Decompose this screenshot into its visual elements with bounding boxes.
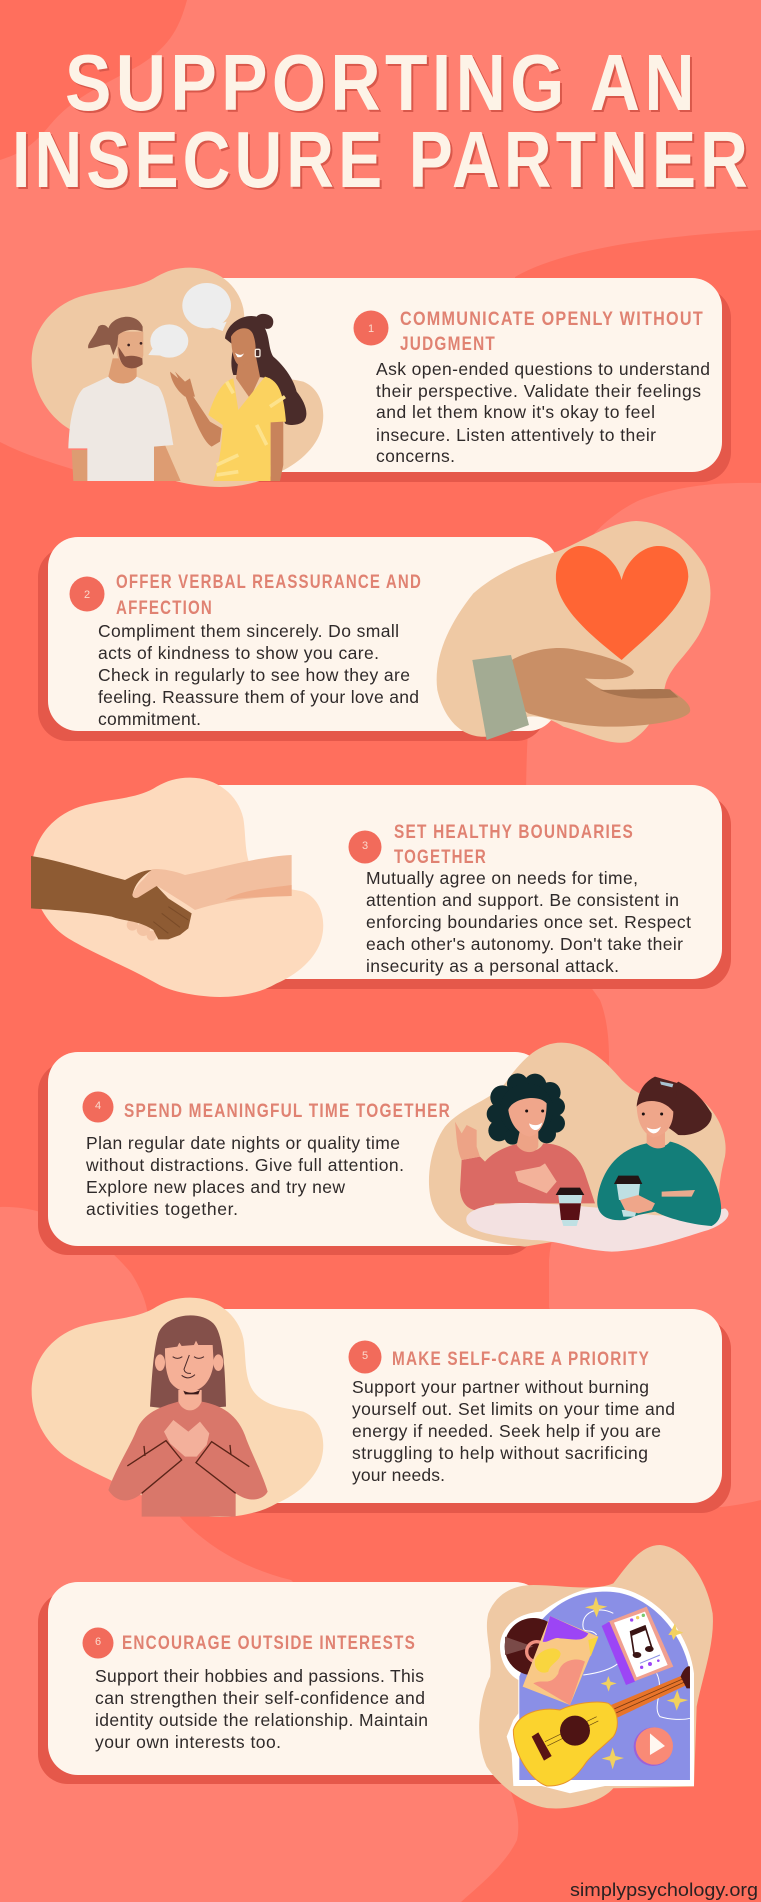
body text 3: enforcing boundaries once set. Respect bbox=[366, 912, 691, 932]
body text 5: your needs. bbox=[352, 1465, 445, 1485]
body text 5: yourself out. Set limits on your time and bbox=[352, 1399, 675, 1419]
heading 2 bbox=[116, 572, 422, 619]
body text 4: activities together. bbox=[86, 1199, 238, 1219]
body text 1: insecure. Listen attentively to their bbox=[376, 425, 656, 445]
source credit: simplypsychology.org bbox=[570, 1880, 758, 1900]
number badge 2 bbox=[70, 576, 104, 612]
title bbox=[12, 38, 752, 204]
number badge 4 bbox=[82, 1092, 114, 1122]
body text 6: Support their hobbies and passions. This bbox=[95, 1666, 424, 1686]
body text 1: their perspective. Validate their feelings bbox=[376, 381, 701, 401]
illustration: hand holding heart bbox=[437, 521, 710, 743]
body text 6: identity outside the relationship. Maintain bbox=[95, 1710, 428, 1730]
body text 3: Mutually agree on needs for time, bbox=[366, 868, 638, 888]
heading 2: AFFECTION bbox=[116, 598, 213, 619]
heading 4: SPEND MEANINGFUL TIME TOGETHER bbox=[124, 1101, 451, 1122]
body text 1: and let them know it's okay to feel bbox=[376, 402, 655, 422]
body text 4: Plan regular date nights or quality time bbox=[86, 1133, 400, 1153]
illustration: two women with coffee bbox=[429, 1043, 729, 1252]
number badge 3: 3 bbox=[362, 840, 368, 852]
number badge 6: 6 bbox=[95, 1636, 101, 1648]
body text 5: energy if needed. Seek help if you are bbox=[352, 1421, 661, 1441]
heading 1 bbox=[400, 309, 704, 355]
body text 2: commitment. bbox=[98, 709, 201, 729]
illustration: two people talking bbox=[32, 268, 323, 487]
panel: step 2 reassurance bbox=[38, 521, 710, 743]
body text 4: Explore new places and try new bbox=[86, 1177, 345, 1197]
body text 3: insecurity as a personal attack. bbox=[366, 956, 619, 976]
body text 6 bbox=[95, 1666, 428, 1752]
body text 2 bbox=[98, 621, 419, 729]
body text 5: Support your partner without burning bbox=[352, 1377, 649, 1397]
body text 3: each other's autonomy. Don't take their bbox=[366, 934, 683, 954]
heading 3 bbox=[394, 822, 634, 868]
panel: step 3 boundaries bbox=[31, 778, 731, 997]
number badge 3 bbox=[348, 830, 382, 864]
body text 3 bbox=[366, 868, 691, 976]
body text 4 bbox=[85, 1133, 404, 1219]
body text 1: concerns. bbox=[376, 446, 455, 466]
body text 2: Check in regularly to see how they are bbox=[98, 665, 410, 685]
number badge 6 bbox=[82, 1628, 114, 1658]
heading 1: COMMUNICATE OPENLY WITHOUT bbox=[400, 309, 704, 330]
number badge 1 bbox=[354, 310, 388, 346]
body text 2: Compliment them sincerely. Do small bbox=[98, 621, 399, 641]
body text 6: your own interests too. bbox=[95, 1732, 281, 1752]
number badge 2: 2 bbox=[84, 589, 90, 601]
number badge 5 bbox=[348, 1340, 382, 1374]
panel: step 1 communicate bbox=[32, 268, 731, 487]
heading 2: OFFER VERBAL REASSURANCE AND bbox=[116, 572, 422, 593]
heading 3: TOGETHER bbox=[394, 847, 487, 868]
panel: step 5 self-care bbox=[32, 1298, 731, 1517]
panel: step 6 outside interests bbox=[38, 1545, 713, 1808]
body text 1: Ask open-ended questions to understand bbox=[376, 359, 710, 379]
number badge 1: 1 bbox=[368, 323, 374, 335]
body text 5: struggling to help without sacrificing bbox=[352, 1443, 648, 1463]
body text 3: attention and support. Be consistent in bbox=[366, 890, 679, 910]
number badge 5: 5 bbox=[362, 1350, 368, 1362]
illustration: handshake bbox=[31, 778, 323, 997]
panel: step 4 meaningful time bbox=[38, 1043, 729, 1255]
body text 2: feeling. Reassure them of your love and bbox=[98, 687, 419, 707]
body text 2: acts of kindness to show you care. bbox=[98, 643, 379, 663]
illustration: music and guitar sticker bbox=[479, 1545, 713, 1808]
heading 5: MAKE SELF-CARE A PRIORITY bbox=[392, 1349, 650, 1370]
body text 5 bbox=[352, 1377, 675, 1485]
heading 1: JUDGMENT bbox=[400, 334, 496, 355]
body text 6: can strengthen their self-confidence and bbox=[95, 1688, 425, 1708]
number badge 4: 4 bbox=[95, 1100, 101, 1112]
heading 6: ENCOURAGE OUTSIDE INTERESTS bbox=[122, 1633, 416, 1654]
heading 3: SET HEALTHY BOUNDARIES bbox=[394, 822, 634, 843]
body text 1 bbox=[376, 359, 710, 466]
body text 4: without distractions. Give full attention. bbox=[85, 1155, 404, 1175]
illustration: woman with hands on chest bbox=[32, 1298, 323, 1517]
